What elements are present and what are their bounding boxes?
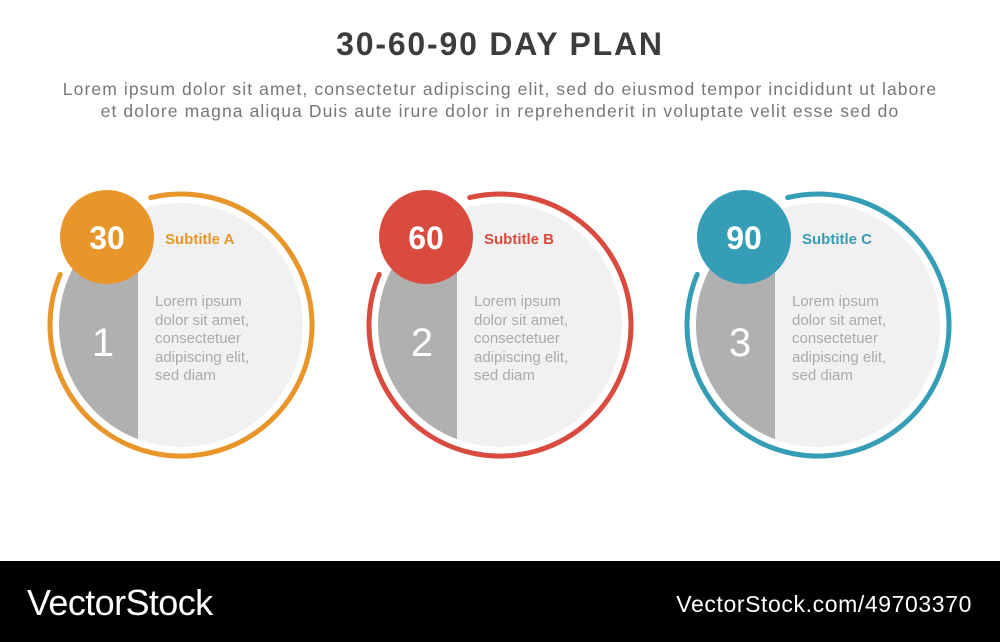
panel: step 1: consectetuer (155, 330, 241, 347)
panel: step 1: 1 (92, 321, 114, 365)
panel: step 3: 3 (729, 321, 751, 365)
panel: step 1: sed diam (155, 367, 216, 384)
panel: step 3: Subtitle C (802, 231, 872, 248)
title: 30-60-90 DAY PLAN (336, 26, 664, 62)
intro text: et dolore magna aliqua Duis aute irure dolor in reprehenderit in voluptate velit esse sed do (101, 101, 899, 121)
panel: step 2: 60 (408, 220, 444, 256)
intro text (63, 79, 937, 121)
panel: step 3: adipiscing elit, (792, 349, 886, 366)
panel: step 3 (687, 190, 949, 456)
panel: step 2: Subtitle B (484, 231, 554, 248)
intro text: Lorem ipsum dolor sit amet, consectetur adipiscing elit, sed do eiusmod tempor incididunt ut labore (63, 79, 937, 99)
panel: step 3: Lorem ipsum (792, 293, 879, 310)
panel: step 2: sed diam (474, 367, 535, 384)
panel: step 1: 30 (89, 220, 125, 256)
footer logo: VectorStock (27, 582, 212, 623)
panel: step 3: consectetuer (792, 330, 878, 347)
panel: step 2: 2 (411, 321, 433, 365)
panel: step 3: sed diam (792, 367, 853, 384)
panel: step 1: dolor sit amet, (155, 312, 249, 329)
panel: step 1: Subtitle A (165, 231, 235, 248)
panel: step 2: consectetuer (474, 330, 560, 347)
panel: step 2: Lorem ipsum (474, 293, 561, 310)
panel: step 2 (369, 190, 631, 456)
panel: step 1: adipiscing elit, (155, 349, 249, 366)
footer bar (0, 561, 1000, 642)
panel: step 2: adipiscing elit, (474, 349, 568, 366)
panel: step 2: dolor sit amet, (474, 312, 568, 329)
panel: step 1: Lorem ipsum (155, 293, 242, 310)
diagram (48, 190, 952, 459)
footer url: VectorStock.com/49703370 (676, 591, 972, 617)
panel: step 3: 90 (726, 220, 762, 256)
panel: step 1 (50, 190, 312, 456)
panel: step 3: dolor sit amet, (792, 312, 886, 329)
